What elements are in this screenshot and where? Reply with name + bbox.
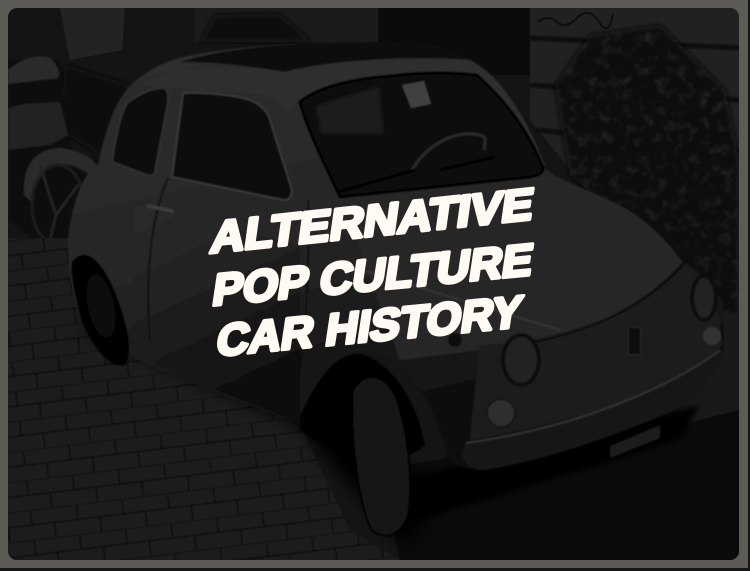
title line 3: CAR HISTORY — [213, 288, 526, 366]
door window — [172, 93, 292, 200]
windscreen — [300, 73, 543, 197]
scooter — [8, 56, 96, 238]
door panel shading — [148, 290, 301, 422]
cobblestone ground — [8, 238, 739, 560]
title line 1: ALTERNATIVE — [208, 180, 537, 263]
parking ticket — [402, 81, 431, 108]
steering wheel — [412, 134, 485, 170]
door lines — [148, 178, 308, 420]
licence plate — [610, 425, 660, 458]
badge — [630, 328, 640, 354]
wipers — [338, 157, 495, 192]
rear window — [112, 88, 168, 176]
bonnet — [345, 170, 682, 360]
rear wheel — [72, 255, 129, 366]
headlight left — [503, 335, 539, 385]
nose panel — [470, 265, 722, 440]
car — [68, 42, 724, 535]
bonnet line — [535, 261, 686, 342]
plants on right — [60, 10, 739, 320]
title — [208, 180, 537, 366]
roof lip — [277, 58, 545, 166]
door handle — [148, 206, 172, 211]
title line 2: POP CULTURE — [209, 236, 536, 316]
car body — [68, 42, 724, 470]
roof — [180, 42, 470, 72]
front wheel — [300, 354, 425, 535]
side lamp — [448, 333, 462, 347]
headlight right — [692, 276, 716, 320]
reflection in windscreen — [315, 85, 385, 135]
front bumper — [462, 347, 723, 470]
indicator left — [488, 400, 514, 426]
indicator right — [703, 327, 721, 345]
